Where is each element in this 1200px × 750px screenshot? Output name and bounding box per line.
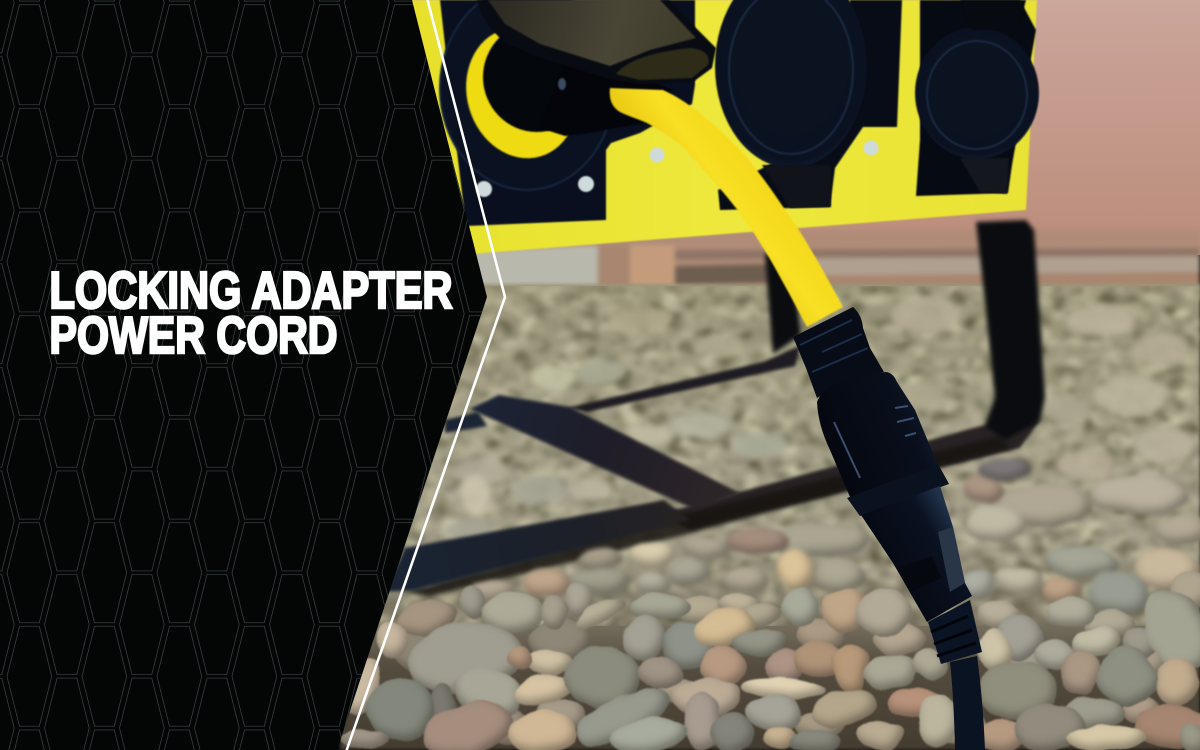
mounting screws	[476, 0, 953, 197]
mid gravel (out of focus)	[444, 297, 1195, 540]
black cable	[950, 656, 985, 750]
near gravel out of focus	[471, 460, 1200, 615]
plug upper body	[817, 372, 948, 515]
yellow power cord	[610, 88, 843, 327]
center socket plate	[718, 0, 902, 210]
white chevron outline	[346, 0, 505, 750]
lower strain relief	[928, 600, 982, 664]
ledge at base of wall	[470, 230, 1200, 300]
title: LOCKING ADAPTER	[50, 262, 452, 320]
left socket plate	[440, 0, 695, 226]
near gravel in focus	[340, 572, 1200, 750]
plug head in left socket	[483, 22, 672, 136]
panel: black chevron with hexagon pattern	[0, 0, 487, 750]
yellow power box	[410, 0, 1039, 254]
title	[50, 262, 452, 365]
strain relief	[793, 307, 884, 398]
plug collar	[847, 464, 949, 516]
socket lid	[477, 0, 716, 84]
black locking plug	[793, 307, 985, 750]
grip marks	[834, 406, 916, 478]
panel: product photo	[340, 0, 1200, 750]
stand and frame	[385, 220, 1045, 596]
left socket flange	[440, 0, 614, 190]
gravel far background	[340, 284, 1200, 750]
center socket cover	[715, 0, 867, 168]
right socket cover	[915, 27, 1039, 159]
plug lower body	[861, 486, 972, 622]
right socket plate	[916, 0, 1036, 196]
yellow ring of socket	[451, 14, 593, 172]
wall background	[400, 0, 1200, 255]
title: POWER CORD	[50, 307, 338, 365]
